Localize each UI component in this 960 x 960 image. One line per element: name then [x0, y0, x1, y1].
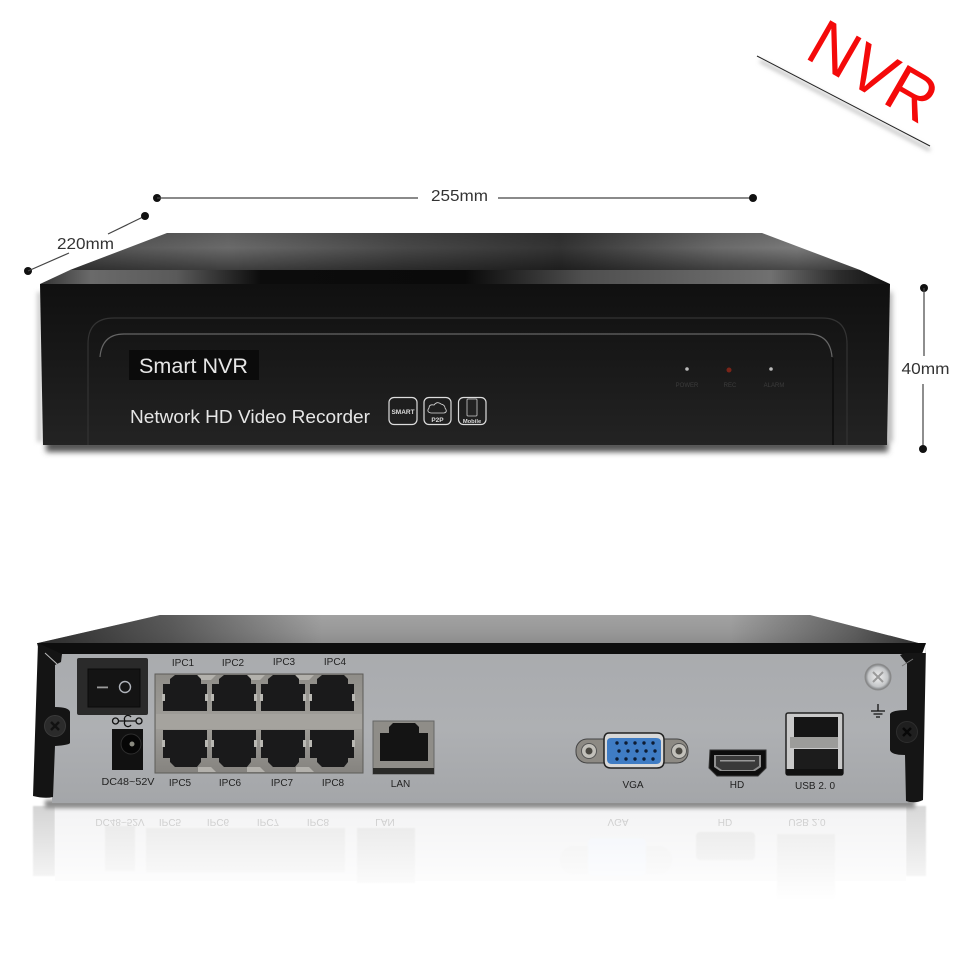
reflection of rear view: VGA	[607, 816, 629, 827]
IPC port labels bottom row: IPC5	[169, 778, 192, 789]
bottom shadow	[45, 800, 915, 808]
IPC port labels bottom row	[169, 778, 345, 789]
label: Smart NVR: Smart NVR	[139, 354, 248, 378]
grounding screw	[865, 664, 891, 690]
status LED: POWER: POWER	[676, 383, 699, 389]
port contact clips	[162, 694, 355, 747]
VGA pin holes	[615, 741, 657, 761]
reflection of rear view: DC48~52V	[95, 816, 145, 827]
left bracket	[33, 643, 70, 798]
DC power jack	[102, 729, 154, 788]
icon: Mobile: Mobile	[463, 419, 482, 425]
ports row two	[163, 730, 354, 767]
VGA port: VGA	[622, 780, 644, 791]
reflection of rear view: IPC7	[257, 816, 280, 827]
left mounting screw	[44, 716, 66, 736]
icon: SMART	[389, 398, 417, 424]
ports row one	[163, 675, 354, 711]
HD port: HD	[730, 780, 744, 791]
status LED: REC: REC	[724, 383, 737, 389]
right mounting screw	[896, 722, 918, 742]
status LED: REC	[724, 368, 737, 389]
underline shadow	[760, 61, 930, 150]
IPC port labels top row	[172, 657, 347, 669]
IPC port labels top row: IPC2	[222, 658, 245, 669]
icon: P2P cloud: P2P	[431, 417, 444, 424]
VGA port	[576, 733, 688, 791]
DC power jack: DC48~52V	[102, 776, 154, 788]
dimension: depth 220mm	[24, 212, 149, 275]
icon: P2P cloud	[424, 398, 451, 424]
IPC port labels bottom row: IPC6	[219, 778, 242, 789]
status LED: POWER	[676, 367, 699, 389]
HD port	[709, 750, 766, 791]
IPC port labels top row: IPC4	[324, 657, 347, 668]
LAN port	[373, 721, 434, 790]
reflection of rear view: IPC8	[307, 816, 330, 827]
label: Smart NVR	[129, 350, 259, 380]
reflection of rear view: USB 2.0	[788, 816, 826, 827]
drop shadow	[46, 440, 888, 452]
USB 2.0 ports: USB 2. 0	[795, 781, 835, 792]
front view of recorder	[37, 233, 892, 452]
label: Network HD Video Recorder: Network HD Video Recorder	[130, 406, 370, 427]
NVR title: NVR	[796, 5, 951, 137]
rear top black edge	[37, 643, 926, 654]
inner panel line	[100, 334, 832, 357]
top surface	[70, 233, 860, 270]
right bracket	[890, 645, 926, 802]
power switch	[77, 658, 148, 715]
IPC port labels top row: IPC1	[172, 658, 195, 669]
light port shoulders	[198, 675, 314, 772]
dimension: depth 220mm: 220mm	[57, 236, 114, 253]
outer panel line	[88, 318, 847, 445]
badge: NVR title with underline	[757, 5, 951, 150]
front top bevel	[40, 270, 890, 284]
dimension: width 255mm	[153, 188, 757, 205]
IPC port labels bottom row: IPC8	[322, 778, 345, 789]
status LED: ALARM: ALARM	[764, 383, 784, 389]
status LED: ALARM	[764, 367, 784, 389]
PoE RJ45 port block	[155, 674, 363, 773]
dimension: height 40mm	[902, 284, 950, 453]
icon: SMART: SMART	[391, 409, 415, 416]
top surface	[38, 615, 926, 645]
icon: Mobile	[458, 398, 486, 425]
grey rear panel	[52, 654, 908, 803]
reflection of rear view: IPC6	[207, 816, 230, 827]
reflection of rear view: LAN	[375, 816, 395, 827]
reflection of rear view: IPC5	[159, 816, 182, 827]
front face	[40, 284, 890, 445]
icon: ground symbol	[871, 704, 885, 717]
LAN port: LAN	[391, 779, 410, 790]
IPC port labels top row: IPC3	[273, 657, 296, 668]
IPC port labels bottom row: IPC7	[271, 778, 294, 789]
reflection of rear view: HD	[718, 816, 732, 827]
power polarity symbol	[112, 715, 142, 727]
dimension: height 40mm: 40mm	[902, 361, 950, 378]
USB 2.0 ports	[786, 713, 843, 792]
underline	[757, 56, 930, 146]
rear view of recorder	[33, 615, 926, 808]
dimension: width 255mm: 255mm	[431, 188, 488, 205]
reflection of rear view	[20, 806, 940, 901]
